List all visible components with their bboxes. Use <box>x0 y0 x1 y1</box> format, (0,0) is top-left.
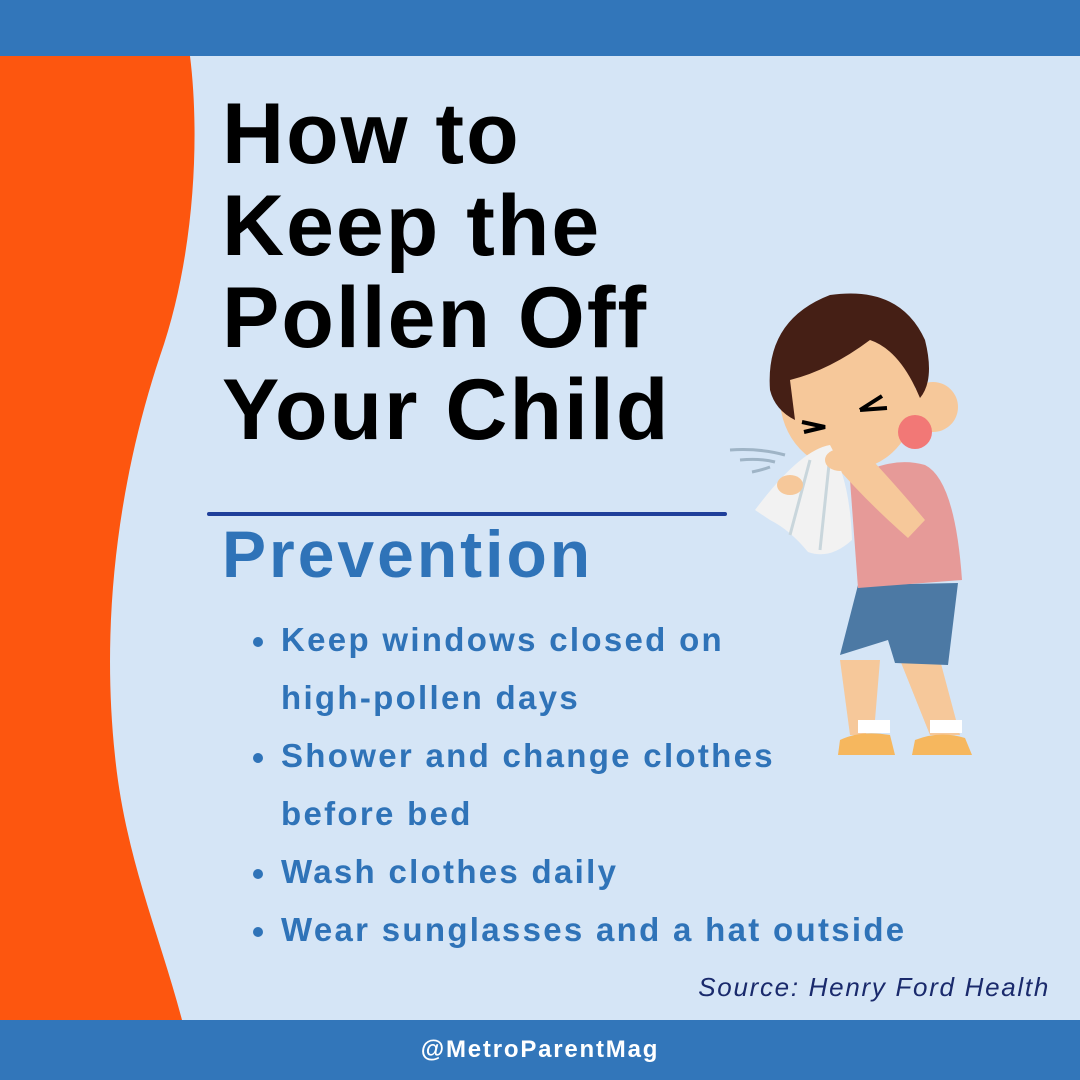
bullet list <box>253 621 906 948</box>
title <box>222 86 670 458</box>
spray <box>730 450 785 472</box>
shirt <box>850 462 962 588</box>
hair <box>770 293 929 420</box>
bullet list: Shower and change clothes <box>281 737 775 774</box>
top bar <box>0 0 1080 56</box>
bullet list: Keep windows closed on <box>281 621 724 658</box>
title: Your Child <box>222 362 670 458</box>
shorts <box>840 583 958 665</box>
shoes <box>838 733 895 755</box>
title: How to <box>222 86 521 182</box>
head <box>908 382 958 432</box>
title: Keep the <box>222 178 601 274</box>
bullet list: Wash clothes daily <box>281 853 618 890</box>
bullet list: Wear sunglasses and a hat outside <box>281 911 906 948</box>
tissue <box>755 445 852 554</box>
eyes <box>802 396 887 432</box>
title: Pollen Off <box>222 270 648 366</box>
bottom bar <box>0 1020 1080 1080</box>
hands <box>777 475 803 495</box>
heading: prevention: Prevention <box>222 517 593 591</box>
bullet list: before bed <box>281 795 473 832</box>
bottom bar: @MetroParentMag <box>421 1036 659 1063</box>
arm <box>835 452 925 538</box>
divider <box>207 512 727 516</box>
legs <box>840 660 880 735</box>
bullet list: high-pollen days <box>281 679 580 716</box>
orange wave <box>0 56 195 1020</box>
source: Source: Henry Ford Health <box>698 972 1050 1002</box>
illustration: sneezing child <box>730 294 972 755</box>
